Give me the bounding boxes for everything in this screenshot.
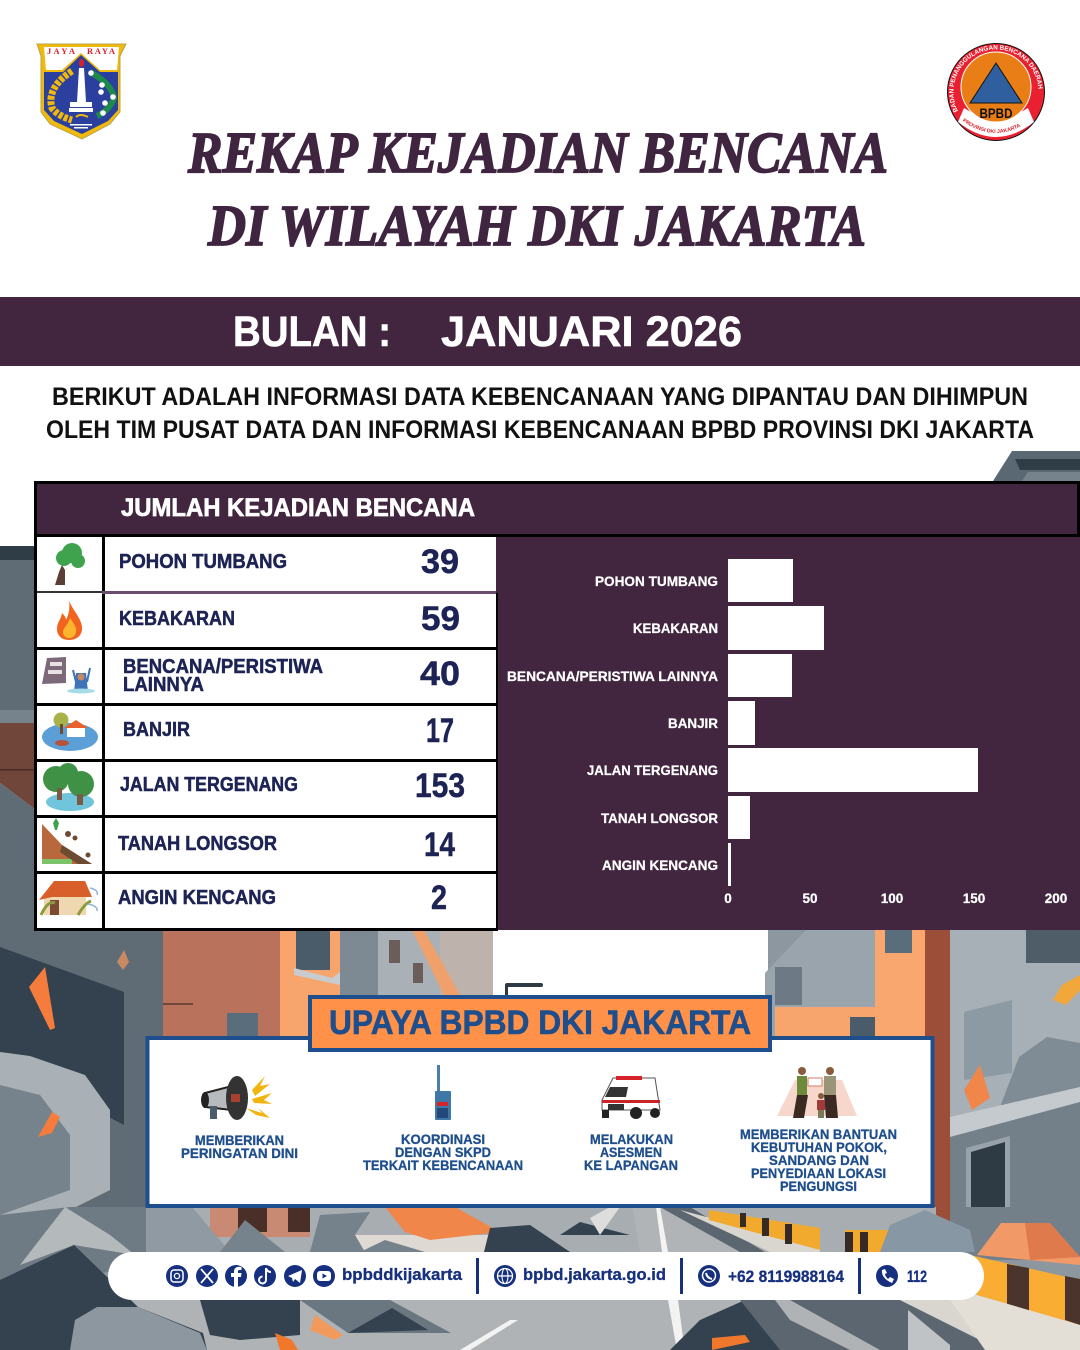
row: banjir: BANJIR: [123, 719, 191, 741]
effort: asesmen: [584, 1076, 678, 1173]
effort: bantuan: SANDANG DAN: [769, 1152, 869, 1168]
emergency number: [876, 1265, 927, 1287]
icon: telegram: [284, 1265, 306, 1287]
bar: bencana lainnya: BENCANA/PERISTIWA LAINNYA: [507, 669, 718, 684]
heading box: upaya: UPAYA BPBD DKI JAKARTA: [329, 1004, 751, 1042]
bar: jalan tergenang: [587, 748, 978, 792]
table header: JUMLAH KEJADIAN BENCANA: [121, 494, 475, 522]
row: banjir: [42, 712, 454, 751]
website: bpbd.jakarta.go.id: [523, 1265, 666, 1284]
effort: peringatan dini: MEMBERIKAN: [195, 1132, 284, 1148]
row: tanah longsor: TANAH LONGSOR: [118, 833, 277, 855]
row: angin kencang: ANGIN KENCANG: [118, 887, 276, 909]
social handle: bpbddkijakarta: [342, 1265, 463, 1284]
logo: BPBD: BPBD: [980, 106, 1013, 121]
chart axis labels: 150: [963, 891, 985, 906]
row: bencana peristiwa lainnya: BENCANA/PERISTIWA: [123, 656, 323, 678]
row: jalan tergenang: [43, 763, 465, 811]
bar: angin kencang: ANGIN KENCANG: [602, 858, 718, 873]
effort: koordinasi: TERKAIT KEBENCANAAN: [363, 1157, 523, 1173]
effort: koordinasi: DENGAN SKPD: [395, 1144, 491, 1160]
effort: koordinasi: [363, 1065, 523, 1173]
month banner: [0, 297, 1080, 366]
logo: BPBD: [947, 43, 1045, 141]
table header: [36, 482, 1078, 536]
logo: BPBD: BADAN PENANGGULANGAN BENCANA DAERAH: [949, 45, 1043, 112]
icon: youtube: [313, 1265, 335, 1287]
bar: pohon tumbang: [595, 559, 793, 602]
row: tanah longsor: 14: [424, 826, 455, 864]
effort: asesmen: ASESMEN: [600, 1144, 662, 1160]
logo: DKI Jakarta crest: JAYA: [47, 46, 76, 56]
effort: asesmen: MELAKUKAN: [590, 1131, 673, 1147]
row: banjir: 17: [426, 712, 454, 750]
effort: peringatan dini: [181, 1076, 298, 1161]
row: bencana peristiwa lainnya: [42, 655, 460, 696]
panel: upaya BPBD: [148, 997, 932, 1206]
bar: angin kencang: [602, 843, 731, 886]
heading box: upaya: [310, 997, 770, 1050]
row: kebakaran: 59: [421, 600, 460, 638]
bar: tanah longsor: [601, 796, 750, 839]
effort: bantuan: PENYEDIAAN LOKASI: [751, 1165, 886, 1181]
footer contact bar: [108, 1252, 984, 1300]
title: [187, 120, 888, 258]
row: pohon tumbang: POHON TUMBANG: [119, 551, 287, 573]
logo: BPBD: PROVINSI DKI JAKARTA: [962, 118, 1021, 133]
bar: jalan tergenang: JALAN TERGENANG: [587, 763, 718, 778]
row: jalan tergenang: JALAN TERGENANG: [120, 774, 298, 796]
data table: [34, 537, 498, 931]
row: tanah longsor: [42, 818, 455, 864]
title: DI WILAYAH DKI JAKARTA: [207, 193, 866, 258]
chart axis labels: 200: [1045, 891, 1067, 906]
chart axis labels: 50: [802, 891, 818, 906]
chart axis labels: [724, 891, 1067, 906]
title: REKAP KEJADIAN BENCANA: [187, 120, 888, 185]
intro text: BERIKUT ADALAH INFORMASI DATA KEBENCANAAN YANG DIPANTAU DAN DIHIMPUN: [52, 383, 1028, 411]
chart panel: [496, 537, 1080, 930]
icon: tiktok: [254, 1265, 276, 1287]
logo: DKI Jakarta crest: [37, 44, 126, 139]
chart axis labels: 100: [881, 891, 903, 906]
row: bencana peristiwa lainnya: 40: [420, 655, 460, 693]
whatsapp: +62 8119988164: [728, 1267, 844, 1286]
month banner: JANUARI 2026: [441, 308, 742, 356]
effort: bantuan: KEBUTUHAN POKOK,: [751, 1139, 887, 1155]
effort: bantuan: [740, 1067, 897, 1194]
row: pohon tumbang: 39: [421, 543, 459, 581]
background scene: damaged city street: [0, 451, 1080, 1350]
row: angin kencang: [39, 879, 447, 917]
bar: tanah longsor: TANAH LONGSOR: [601, 811, 718, 826]
icon: facebook: [225, 1265, 247, 1287]
row: jalan tergenang: 153: [415, 767, 465, 805]
logo: DKI Jakarta crest: RAYA: [87, 46, 116, 56]
bar: banjir: [668, 701, 755, 745]
effort: bantuan: PENGUNGSI: [780, 1178, 857, 1194]
chart axis labels: 0: [724, 891, 732, 906]
row: kebakaran: [57, 600, 460, 640]
icon: instagram: [166, 1265, 188, 1287]
effort: koordinasi: KOORDINASI: [401, 1131, 485, 1147]
effort: bantuan: MEMBERIKAN BANTUAN: [740, 1126, 897, 1142]
bar: banjir: BANJIR: [668, 716, 718, 731]
bar: kebakaran: [633, 606, 824, 650]
bar: pohon tumbang: POHON TUMBANG: [595, 574, 718, 589]
bar: bencana lainnya: [507, 654, 792, 697]
row: kebakaran: KEBAKARAN: [119, 608, 235, 630]
effort: peringatan dini: PERINGATAN DINI: [181, 1145, 298, 1161]
emergency number: 112: [907, 1267, 927, 1286]
row: bencana peristiwa lainnya: LAINNYA: [123, 674, 204, 696]
row: angin kencang: 2: [431, 879, 447, 917]
intro text: [46, 383, 1034, 444]
row: pohon tumbang: [55, 543, 459, 585]
effort: asesmen: KE LAPANGAN: [584, 1157, 678, 1173]
icon: x: [196, 1265, 218, 1287]
bar: kebakaran: KEBAKARAN: [633, 621, 718, 636]
whatsapp: [698, 1265, 844, 1287]
month banner: BULAN :: [233, 308, 391, 356]
